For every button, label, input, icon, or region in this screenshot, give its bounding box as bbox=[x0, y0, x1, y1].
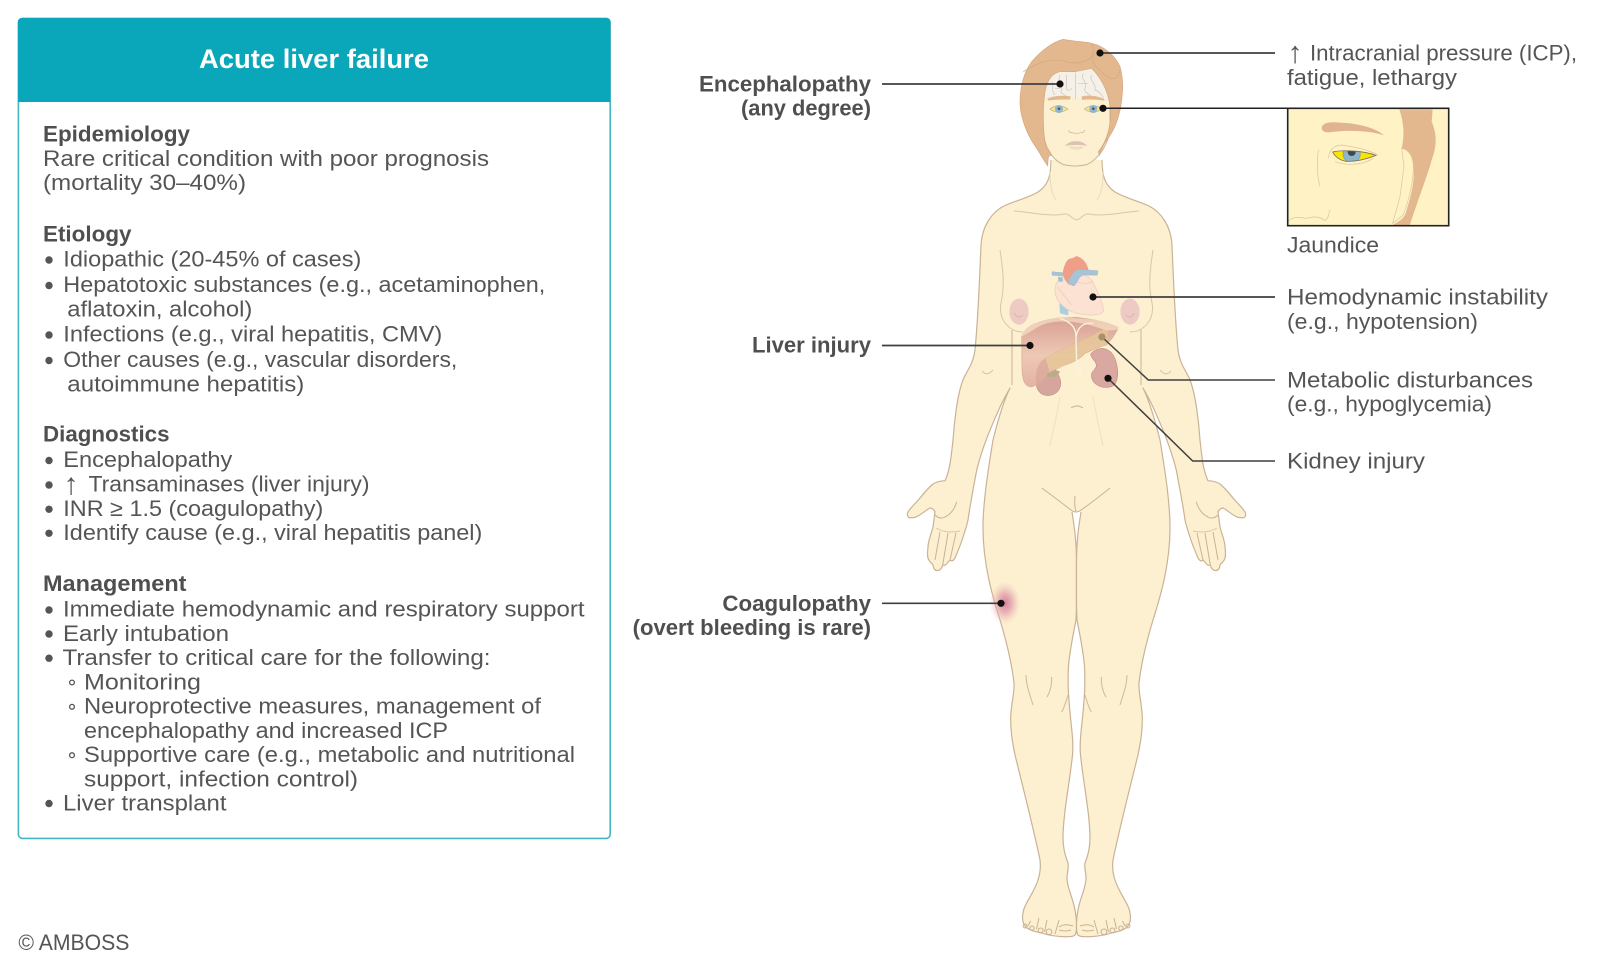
palm and finger lines bbox=[935, 502, 957, 565]
label: metabolic disturbances: (e.g., hypoglycemia) bbox=[1287, 391, 1492, 416]
head bbox=[1020, 39, 1123, 166]
brows bbox=[1047, 96, 1105, 101]
falciform ligament bbox=[1060, 318, 1093, 372]
section: diagnostics: Transaminases (liver injury) bbox=[88, 472, 370, 497]
hair strand lines bbox=[1023, 44, 1120, 79]
label: kidney injury: Kidney injury bbox=[1287, 448, 1426, 473]
section: management bbox=[43, 571, 585, 815]
toes bbox=[1028, 918, 1059, 934]
nose and mouth bbox=[1065, 130, 1088, 150]
label: coagulopathy: Coagulopathy bbox=[722, 591, 871, 616]
leader: hemodynamic bbox=[1089, 293, 1275, 301]
inset face lines bbox=[1289, 150, 1329, 221]
inset brow bbox=[1322, 122, 1384, 135]
groin and navel lines bbox=[1042, 406, 1110, 512]
label: encephalopathy: Encephalopathy bbox=[699, 71, 871, 96]
label: hemodynamic instability: Hemodynamic instability bbox=[1287, 285, 1549, 310]
kidney left bbox=[1036, 367, 1061, 396]
pancreas bbox=[1045, 329, 1108, 370]
section: management: Liver transplant bbox=[63, 790, 227, 815]
breast fold bbox=[1000, 250, 1023, 332]
section: etiology: Hepatotoxic substances (e.g., acetaminophen, bbox=[63, 272, 545, 297]
section: management: support, infection control) bbox=[84, 766, 358, 791]
section: diagnostics: Diagnostics bbox=[43, 422, 170, 447]
section: etiology: Other causes (e.g., vascular disorders, bbox=[63, 347, 457, 372]
leader: jaundice bbox=[1099, 105, 1288, 112]
label: encephalopathy bbox=[699, 71, 871, 121]
leader: intracranial pressure bbox=[1096, 49, 1275, 57]
section: management: Early intubation bbox=[63, 621, 229, 646]
gallbladder bbox=[1047, 371, 1060, 377]
leader: metabolic bbox=[1098, 333, 1275, 380]
label: intracranial pressure: fatigue, lethargy bbox=[1287, 65, 1458, 90]
section: etiology bbox=[43, 222, 545, 396]
section: diagnostics: INR ≥ 1.5 (coagulopathy) bbox=[63, 496, 323, 521]
section: management: Transfer to critical care for the following: bbox=[62, 645, 490, 670]
section: etiology: Idiopathic (20-45% of cases) bbox=[63, 247, 361, 272]
translucent breast overlap bbox=[1022, 316, 1127, 337]
label: intracranial pressure: ↑ bbox=[1288, 36, 1302, 70]
panel header: Acute liver failure bbox=[199, 44, 429, 74]
leader: encephalopathy bbox=[882, 80, 1064, 88]
label: hemodynamic instability: (e.g., hypotension) bbox=[1287, 309, 1478, 334]
label: coagulopathy: (overt bleeding is rare) bbox=[633, 615, 871, 640]
label: encephalopathy: (any degree) bbox=[741, 96, 871, 121]
eyes bbox=[1050, 105, 1102, 113]
inset eye bbox=[1329, 145, 1378, 164]
leader: kidney bbox=[1104, 375, 1275, 461]
label: hemodynamic instability bbox=[1287, 285, 1549, 334]
section: epidemiology: Epidemiology bbox=[43, 122, 190, 147]
section: management: Monitoring bbox=[84, 669, 201, 694]
label: metabolic disturbances bbox=[1287, 367, 1533, 416]
section: etiology: Etiology bbox=[43, 222, 132, 247]
label: jaundice: Jaundice bbox=[1287, 233, 1379, 258]
label: coagulopathy bbox=[633, 591, 871, 640]
face bbox=[1043, 63, 1110, 166]
leader: liver injury bbox=[882, 342, 1034, 349]
panel header bbox=[18, 18, 610, 102]
inset hair bbox=[1393, 109, 1436, 225]
section: etiology: Infections (e.g., viral hepatitis, CMV) bbox=[63, 322, 442, 347]
section: diagnostics bbox=[43, 422, 482, 545]
kidney right bbox=[1091, 348, 1118, 387]
label: intracranial pressure bbox=[1287, 36, 1577, 90]
section: diagnostics: Encephalopathy bbox=[63, 447, 233, 472]
breast overlay and areolae bbox=[1009, 299, 1140, 325]
label: intracranial pressure: Intracranial pressure (ICP), bbox=[1310, 41, 1577, 66]
section: epidemiology: (mortality 30–40%) bbox=[43, 170, 246, 195]
section: management: Neuroprotective measures, management of bbox=[84, 694, 542, 719]
figure: female body bbox=[907, 160, 1246, 937]
section: epidemiology: Rare critical condition with poor prognosis bbox=[43, 146, 489, 171]
label: liver injury: Liver injury bbox=[752, 333, 871, 358]
body left half bbox=[907, 160, 1077, 937]
inset ear bbox=[1393, 148, 1413, 223]
organs: liver, kidneys, pancreas, heart bbox=[1009, 256, 1140, 396]
IVC bbox=[1059, 303, 1068, 315]
body right half (mirror) bbox=[1076, 160, 1246, 937]
copyright: © AMBOSS bbox=[18, 930, 129, 955]
section: management: Supportive care (e.g., metabolic and nutritional bbox=[84, 742, 575, 767]
heart bbox=[1052, 256, 1103, 315]
section: diagnostics: Identify cause (e.g., viral hepatitis panel) bbox=[63, 520, 482, 545]
section: management: Management bbox=[43, 571, 187, 596]
section: management: encephalopathy and increased ICP bbox=[84, 718, 448, 743]
bruise on thigh bbox=[989, 581, 1021, 625]
panel: acute liver failure summary bbox=[18, 18, 610, 838]
section: diagnostics: ↑ bbox=[64, 468, 78, 501]
hair bbox=[1020, 39, 1123, 166]
brain bbox=[1045, 68, 1107, 99]
section: management: Immediate hemodynamic and respiratory support bbox=[63, 596, 585, 622]
section: epidemiology bbox=[43, 122, 489, 195]
leader: coagulopathy bbox=[882, 600, 1005, 607]
inner liver lobe bbox=[1036, 358, 1049, 387]
inset: jaundiced eye bbox=[1288, 108, 1449, 226]
label: metabolic disturbances: Metabolic disturbances bbox=[1287, 367, 1533, 392]
liver bbox=[1022, 317, 1118, 387]
section: etiology: autoimmune hepatitis) bbox=[67, 372, 304, 396]
section: etiology: aflatoxin, alcohol) bbox=[67, 296, 252, 322]
knee lines bbox=[1026, 675, 1068, 712]
